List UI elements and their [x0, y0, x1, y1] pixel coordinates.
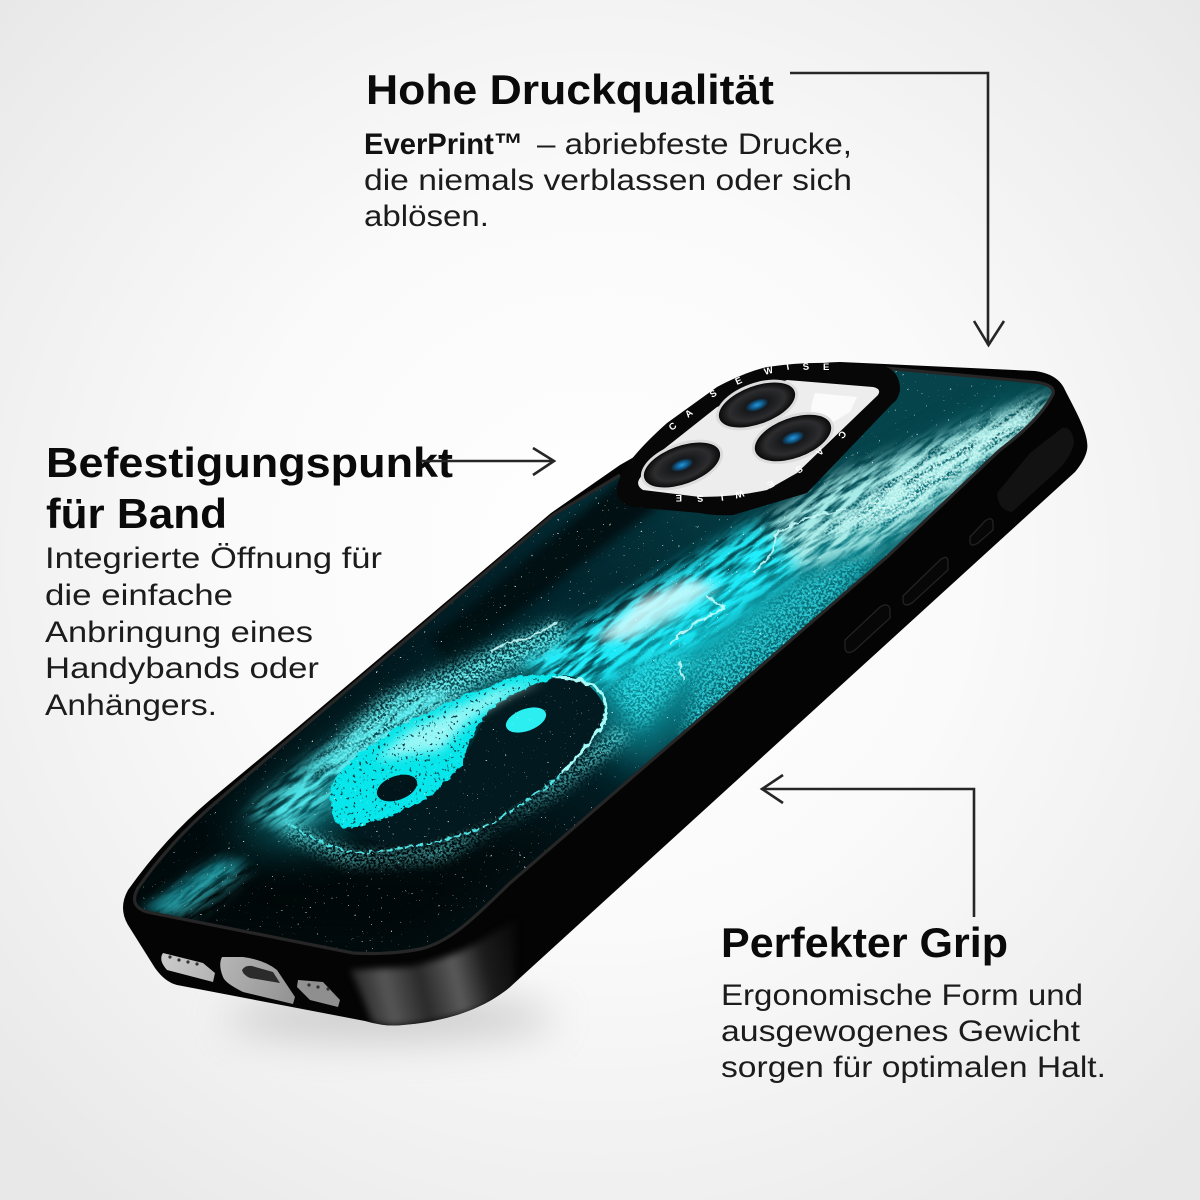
heading: für Band — [46, 490, 227, 537]
callout: grip — [721, 919, 1106, 1084]
description: Integrierte Öffnung für — [45, 542, 382, 575]
screen rim — [135, 368, 1053, 954]
callout: strap attachment — [45, 439, 453, 722]
camera ring branding — [667, 361, 848, 504]
glowing cyan half — [330, 675, 563, 830]
fine nebula grain — [285, 400, 1040, 864]
description: EverPrint™ — [364, 128, 523, 161]
phone case — [123, 362, 1088, 1026]
dark flecks on cyan half — [330, 674, 558, 828]
lens left — [634, 430, 730, 500]
left speaker grille — [161, 953, 215, 982]
printed artwork: galaxy with yin-yang — [136, 370, 1052, 952]
charging port — [220, 957, 295, 1004]
heading: Hohe Druckqualität — [366, 66, 774, 113]
side buttons — [845, 519, 993, 653]
heading: Perfekter Grip — [721, 919, 1008, 966]
description: Ergonomische Form und — [721, 979, 1083, 1012]
swirl halo — [287, 677, 605, 853]
arrow: to grip side — [762, 775, 974, 917]
camera ring branding: CASEWISE — [676, 428, 848, 504]
phone shadow — [225, 996, 555, 1040]
heading — [46, 439, 453, 537]
nebula filaments — [490, 510, 847, 682]
bright core highlight — [595, 580, 720, 640]
camera frame — [617, 363, 900, 515]
arrow: to print surface — [790, 73, 1004, 345]
lens right — [745, 402, 841, 474]
yin-yang symbol — [288, 673, 608, 855]
description: sorgen für optimalen Halt. — [721, 1051, 1106, 1084]
callout: print quality — [364, 66, 852, 233]
description: die niemals verblassen oder sich — [364, 164, 852, 197]
description: ausgewogenes Gewicht — [721, 1015, 1081, 1048]
whitish speckle on cyan half — [375, 680, 545, 760]
description — [721, 979, 1106, 1084]
camera island — [617, 361, 900, 515]
description: ablösen. — [364, 200, 489, 233]
arrow: to strap point — [421, 448, 554, 475]
dark lower and upper regions — [316, 815, 575, 934]
heading: Befestigungspunkt — [46, 439, 453, 486]
white camera window — [638, 380, 879, 497]
soft teal glow — [590, 400, 1045, 770]
description: Handybands oder — [45, 652, 319, 685]
noisy nebula streaks — [148, 386, 1052, 920]
description: Anhängers. — [45, 689, 217, 722]
description — [45, 542, 382, 722]
metallic bottom corner — [350, 920, 515, 1026]
description: Anbringung eines — [45, 616, 313, 649]
light dot — [506, 707, 546, 733]
dark half — [345, 675, 604, 844]
description — [364, 128, 852, 233]
right speaker grille — [297, 980, 340, 1007]
case body — [123, 362, 1087, 1026]
dark dot — [376, 774, 418, 802]
lens top — [709, 370, 805, 440]
description: die einfache — [45, 579, 233, 612]
star field — [120, 360, 1080, 960]
side grip panel — [997, 428, 1074, 512]
description: – abriebfeste Drucke, — [537, 128, 852, 161]
camera ring branding: CASEWISE — [667, 361, 829, 433]
